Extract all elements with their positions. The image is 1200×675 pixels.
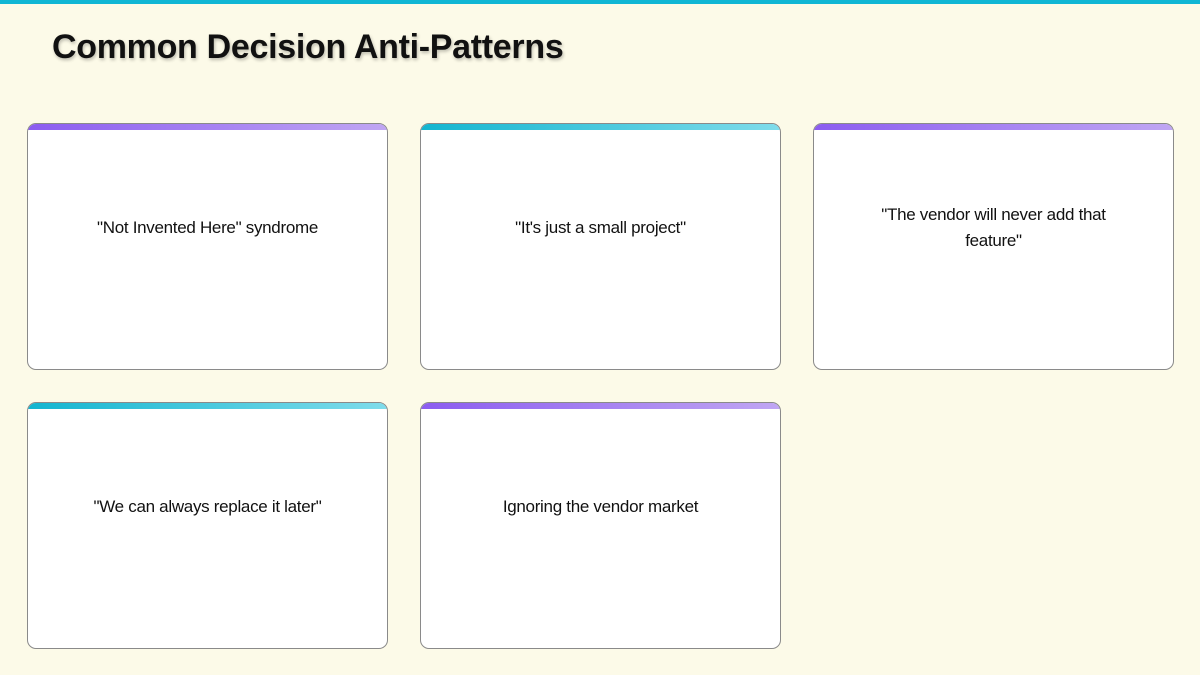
card: ignoring vendor market bbox=[420, 402, 781, 649]
text: "It's just a small project" bbox=[515, 218, 686, 237]
text: "Not Invented Here" syndrome bbox=[97, 218, 318, 237]
card: not invented here bbox=[27, 123, 388, 370]
card: small project bbox=[420, 123, 781, 370]
card: replace later bbox=[27, 402, 388, 649]
card: vendor never add bbox=[813, 123, 1174, 370]
text: "The vendor will never add that feature" bbox=[881, 205, 1106, 250]
text: "We can always replace it later" bbox=[94, 497, 321, 516]
title: Common Decision Anti-Patterns bbox=[52, 28, 563, 66]
text: Ignoring the vendor market bbox=[503, 497, 698, 516]
